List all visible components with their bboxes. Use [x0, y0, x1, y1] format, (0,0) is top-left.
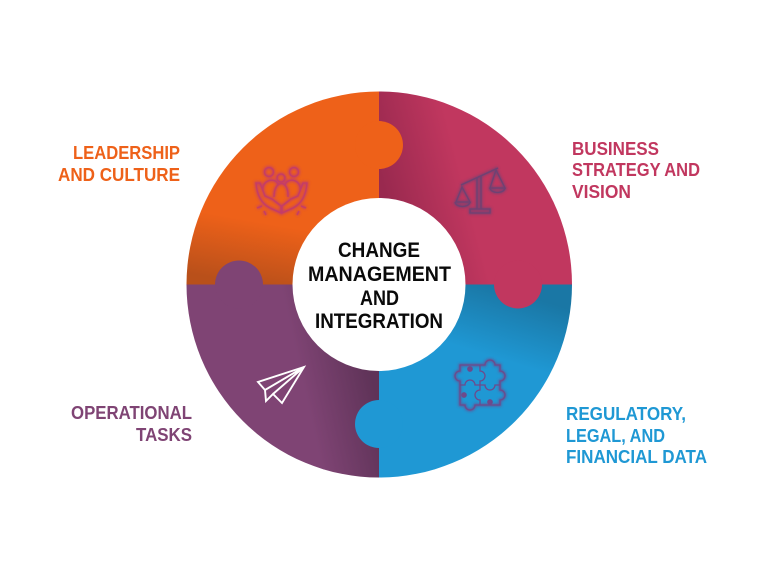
- puzzle tab: orange: [355, 121, 403, 169]
- puzzle tab: blue: [355, 400, 403, 448]
- label: business strategy and vision: [572, 139, 700, 202]
- label: business strategy and vision: STRATEGY AND: [572, 160, 700, 180]
- label: business strategy and vision: BUSINESS: [572, 139, 659, 159]
- heading: center title: [308, 239, 451, 333]
- heading: center title: AND: [360, 287, 399, 310]
- label: leadership and culture: LEADERSHIP: [73, 143, 180, 163]
- label: regulatory, legal, and financial data: LEGAL, AND: [566, 426, 665, 446]
- puzzle tab: purple: [215, 260, 263, 308]
- icon: puzzle pieces: [455, 360, 505, 410]
- heading: center title: MANAGEMENT: [308, 263, 451, 286]
- icon: balance scale: [455, 168, 505, 213]
- label: operational tasks: TASKS: [136, 425, 192, 445]
- icon: paper airplane: [258, 367, 304, 403]
- puzzle tab: pink: [494, 260, 542, 308]
- panel: business strategy and vision segment: [379, 92, 572, 284]
- panel: regulatory, legal, and financial data segment: [379, 284, 572, 478]
- icon: people in caring hands: [256, 168, 307, 215]
- panel: leadership and culture segment: [186, 92, 379, 284]
- label: leadership and culture: AND CULTURE: [58, 165, 180, 185]
- label: regulatory, legal, and financial data: REGULATORY,: [566, 404, 686, 424]
- center circle: [292, 198, 466, 371]
- label: regulatory, legal, and financial data: [566, 404, 707, 467]
- panel: operational tasks segment: [186, 284, 379, 478]
- label: operational tasks: OPERATIONAL: [71, 403, 192, 423]
- label: leadership and culture: [58, 143, 180, 185]
- heading: center title: INTEGRATION: [315, 310, 443, 333]
- label: operational tasks: [71, 403, 192, 445]
- label: regulatory, legal, and financial data: FINANCIAL DATA: [566, 447, 707, 467]
- label: business strategy and vision: VISION: [572, 182, 631, 202]
- heading: center title: CHANGE: [338, 239, 420, 262]
